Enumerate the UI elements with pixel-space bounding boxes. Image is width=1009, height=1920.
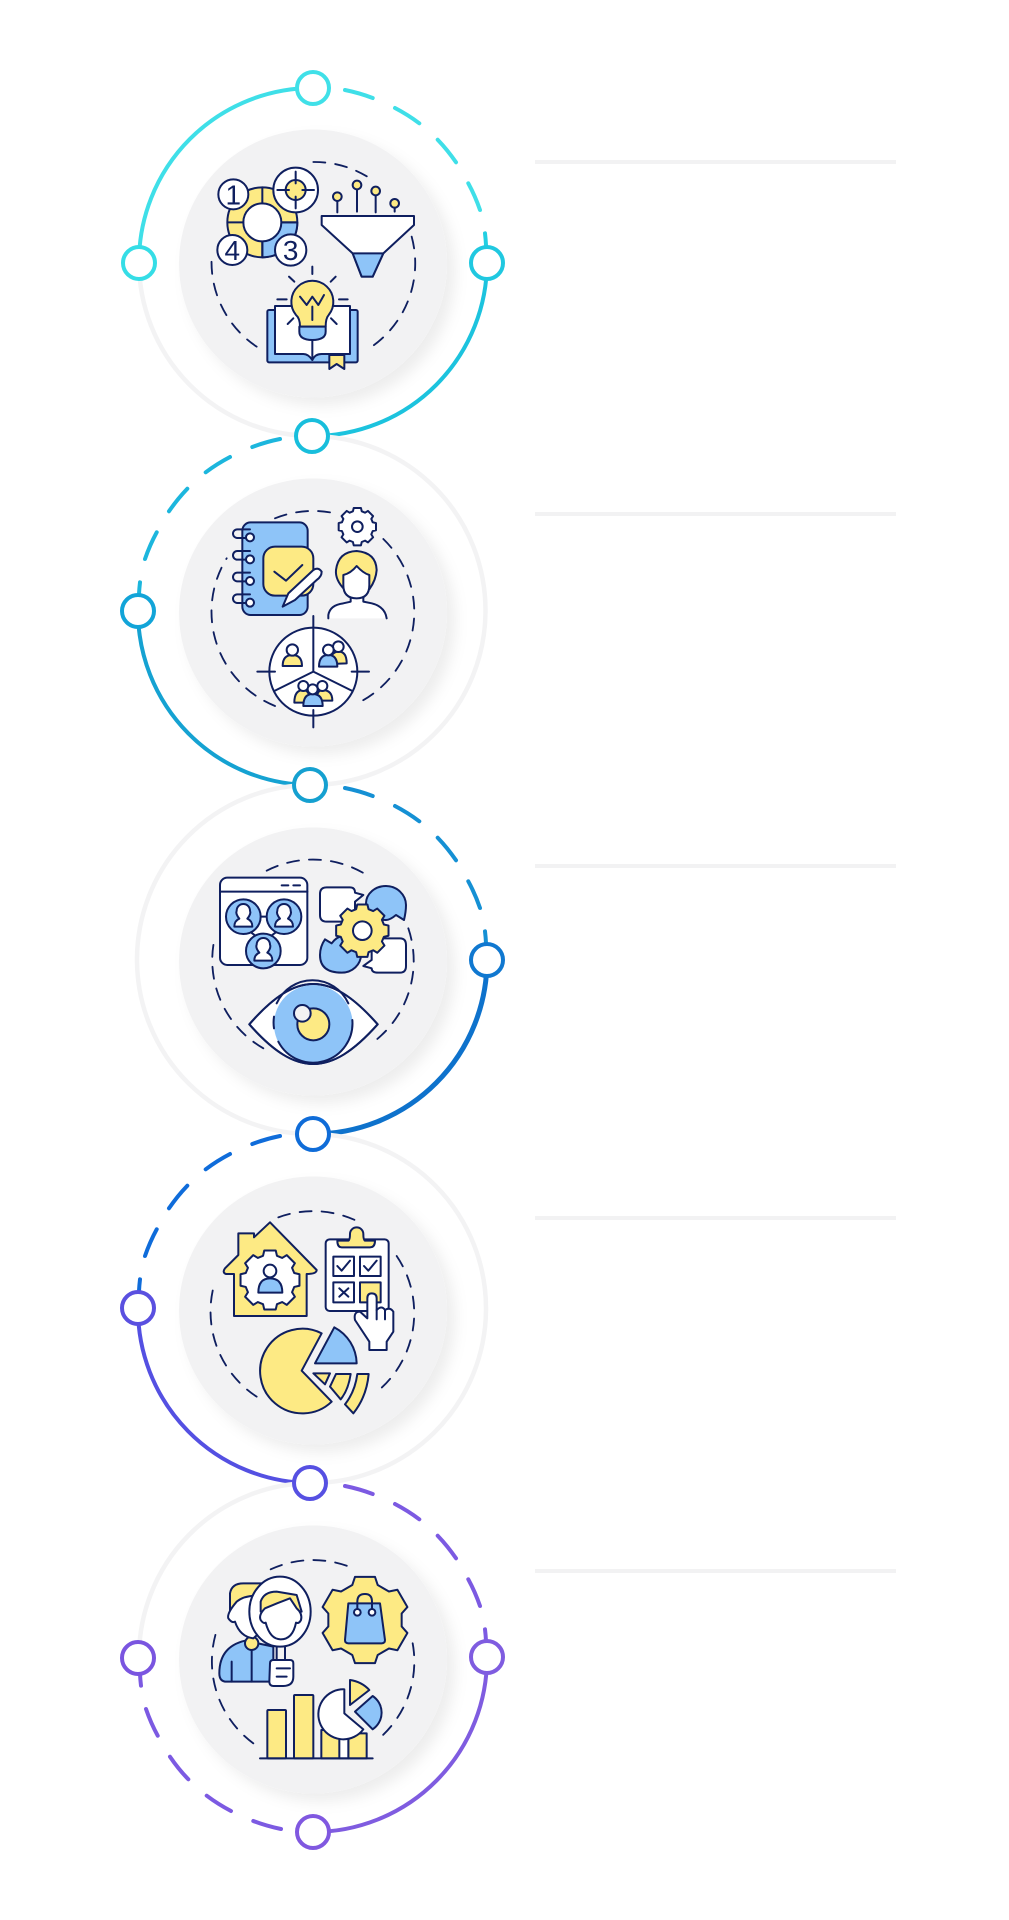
icon: eye bbox=[249, 980, 378, 1064]
icon group 3: online community, conversation, eye bbox=[212, 860, 414, 1064]
icon: numbered ring: 3 bbox=[283, 235, 298, 266]
step 5 ring bbox=[139, 1483, 487, 1832]
icon: funnel bbox=[322, 181, 414, 277]
icon: bar and pie charts bbox=[260, 1680, 382, 1758]
icon: audience target bbox=[257, 616, 369, 727]
icon group 5: customer search, shopping gear, charts bbox=[212, 1560, 414, 1758]
icon: browser window with people bbox=[220, 878, 307, 968]
icon: notebook with check bbox=[233, 522, 322, 615]
icon: checklist and hand bbox=[326, 1227, 393, 1350]
icon: numbered ring bbox=[217, 168, 318, 266]
step 3 ring bbox=[137, 785, 487, 1134]
text placeholder line 4 bbox=[535, 1216, 896, 1220]
text placeholder line 3 bbox=[535, 864, 896, 868]
step 4 ring bbox=[138, 1134, 486, 1483]
gray disc 1 bbox=[179, 130, 447, 398]
gray disc 3 bbox=[179, 828, 447, 1096]
icon: speech bubbles and gear bbox=[320, 886, 406, 973]
icon: house with gear and person bbox=[224, 1222, 317, 1316]
icon group 2: notebook, specialist, target audience bbox=[211, 508, 414, 727]
icon: gear with shopping bag bbox=[323, 1577, 407, 1663]
text placeholder line 1 bbox=[535, 160, 896, 164]
icon: customer under magnifier bbox=[219, 1577, 311, 1686]
gray disc 2 bbox=[179, 478, 447, 746]
icon: specialist bbox=[328, 551, 387, 618]
text placeholder line 5 bbox=[535, 1569, 896, 1573]
gray disc 5 bbox=[179, 1526, 447, 1794]
step 1 ring bbox=[139, 88, 487, 436]
step 2 ring bbox=[138, 436, 486, 785]
dashed orbit 1 bbox=[212, 162, 415, 350]
dashed orbit 2 bbox=[211, 511, 414, 706]
dashed orbit 5 bbox=[212, 1560, 414, 1743]
dashed orbit 3 bbox=[212, 860, 414, 1048]
icon group 1: segmentation, funnel, idea book bbox=[212, 162, 415, 369]
icon: gear bbox=[339, 508, 376, 545]
icon: pie chart bbox=[260, 1327, 369, 1413]
icon: book with light bulb bbox=[267, 267, 358, 369]
icon: numbered ring: 4 bbox=[225, 235, 240, 266]
gray disc 4 bbox=[179, 1176, 447, 1444]
icon group 4: house, checklist, pie bbox=[211, 1211, 414, 1413]
dashed orbit 4 bbox=[211, 1211, 414, 1397]
icon: numbered ring: 1 bbox=[226, 179, 241, 210]
text placeholder line 2 bbox=[535, 512, 896, 516]
node circles bbox=[122, 72, 503, 1848]
